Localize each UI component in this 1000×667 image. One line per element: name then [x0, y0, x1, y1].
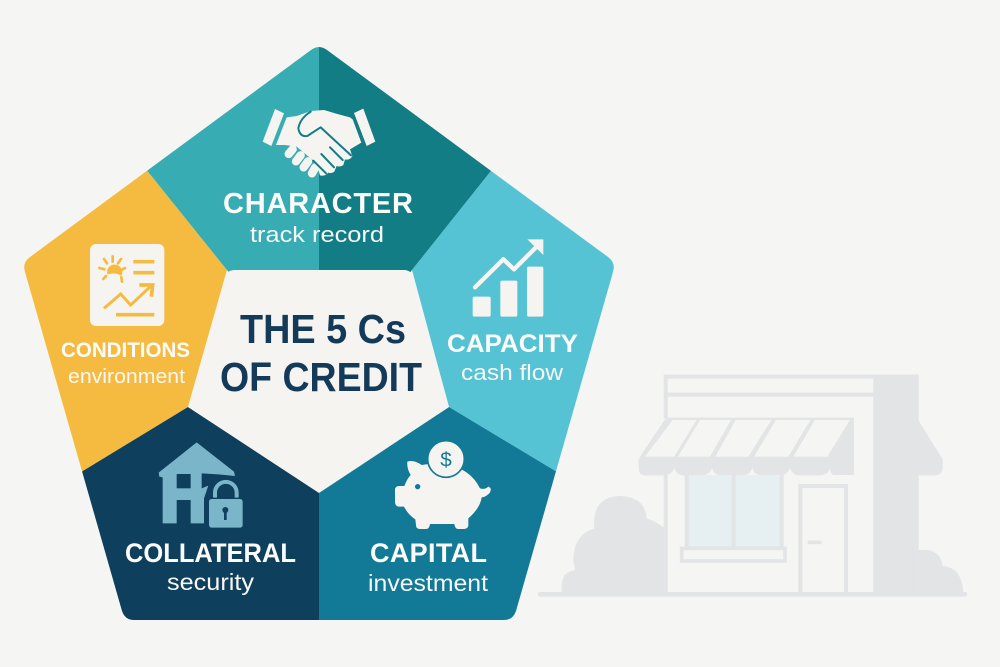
- pentagon diagram: [24, 47, 614, 620]
- panel: capacity: [412, 171, 614, 472]
- awning: [639, 418, 854, 475]
- illustration: storefront: [540, 375, 965, 594]
- building right block: [873, 375, 943, 592]
- panel: conditions: [24, 170, 227, 472]
- icon: piggy bank: [395, 441, 491, 529]
- building outline: [666, 377, 875, 592]
- icon: piggy bank: $: [440, 448, 452, 471]
- center panel: [188, 270, 449, 492]
- left bushes: [562, 496, 667, 592]
- heading: character: CHARACTER: [223, 188, 413, 220]
- label: investment: investment: [368, 570, 489, 596]
- title: OF CREDIT: [220, 354, 422, 400]
- segments: [24, 47, 614, 620]
- ground line: [540, 587, 965, 601]
- window sill: [682, 548, 785, 561]
- label: track record: track record: [250, 222, 384, 247]
- label: security: security: [167, 569, 255, 595]
- heading: capacity: CAPACITY: [447, 330, 578, 358]
- heading: collateral: COLLATERAL: [125, 538, 296, 568]
- icon: conditions report: [90, 244, 164, 326]
- heading: capital: CAPITAL: [370, 538, 487, 568]
- icon: growth chart: [473, 239, 543, 317]
- panel: capital: [319, 407, 556, 620]
- icon: house and lock: [159, 442, 243, 528]
- label: environment: environment: [68, 366, 185, 388]
- door handle: [809, 537, 820, 548]
- heading: conditions: CONDITIONS: [61, 339, 190, 362]
- awning panels: [645, 420, 850, 457]
- icon: handshake: [263, 109, 375, 176]
- window: [687, 475, 782, 548]
- title: THE 5 Cs: [240, 306, 406, 352]
- right bushes: [919, 550, 963, 592]
- door: [800, 486, 846, 592]
- panel: character left half: [147, 47, 319, 272]
- label: cash flow: cash flow: [461, 360, 563, 385]
- panel: collateral: [82, 407, 319, 620]
- panel: character right half: [319, 47, 491, 272]
- title: [220, 306, 422, 400]
